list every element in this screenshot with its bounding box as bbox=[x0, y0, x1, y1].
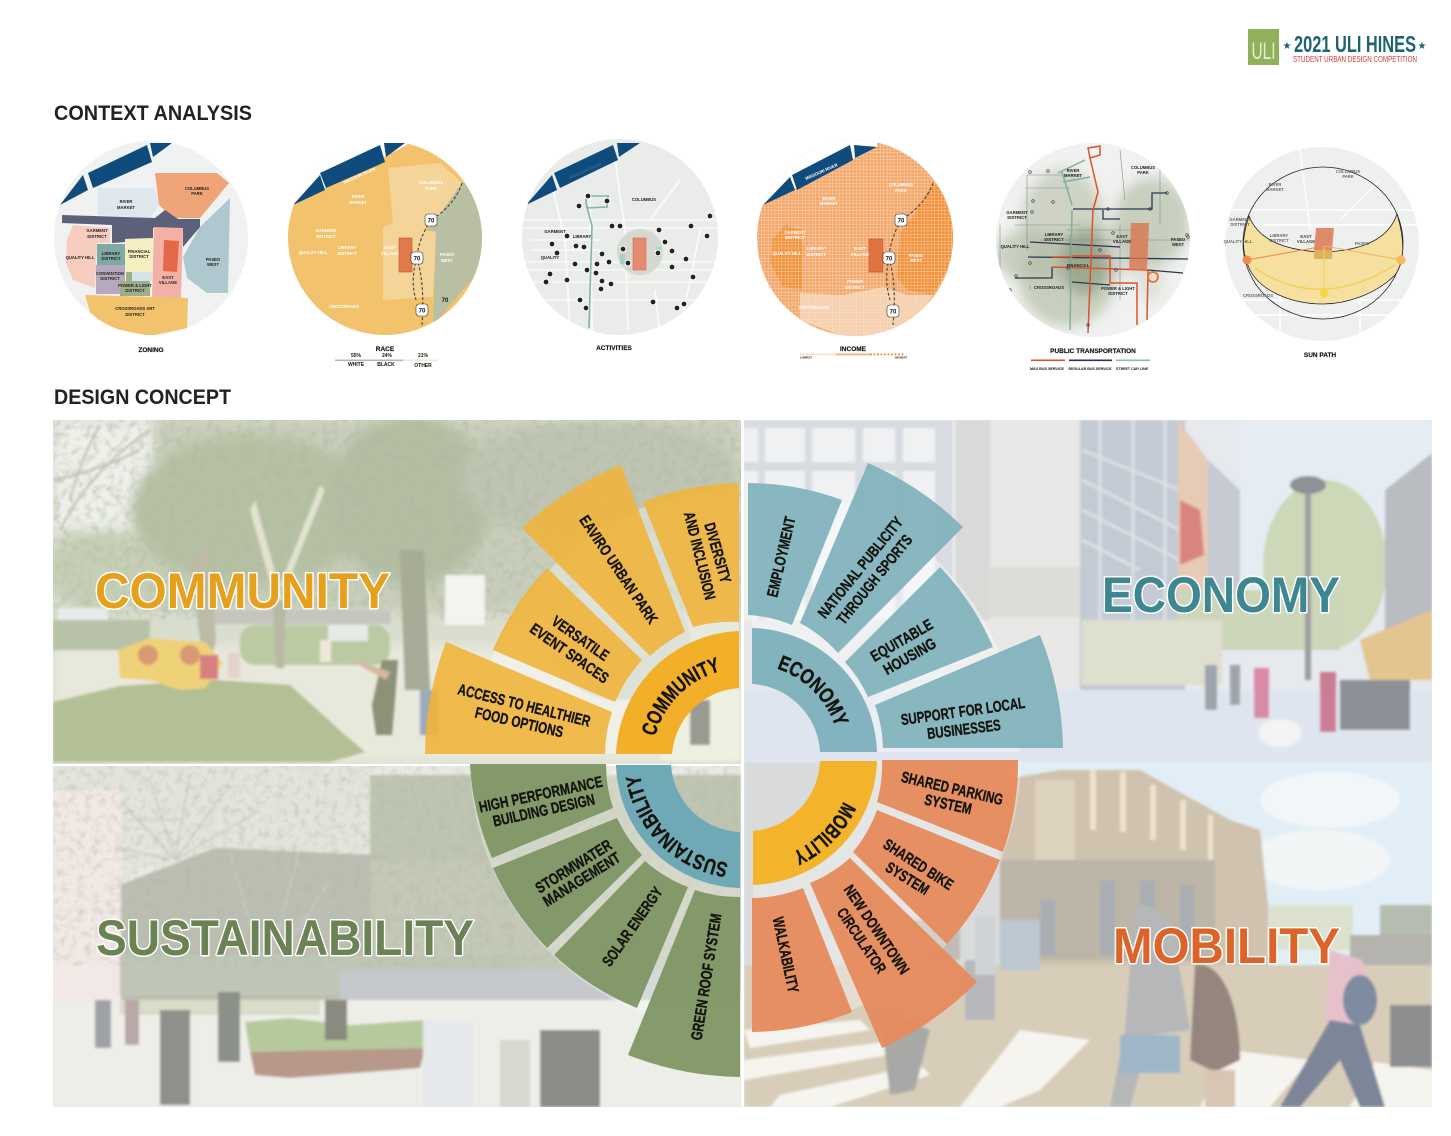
map: activities: MISSOURI RIVER bbox=[569, 161, 602, 180]
map: public transportation: COLUMBUS bbox=[1131, 165, 1155, 170]
wedge: high performance building design bbox=[470, 764, 613, 858]
map: sun path: DISTRICT bbox=[1230, 222, 1250, 227]
quadrant title: community: COMMUNITY bbox=[95, 563, 390, 619]
hub: sustainability: SUSTAINABILITY bbox=[626, 777, 728, 877]
wedge: green roof system: GREEN ROOF SYSTEM bbox=[689, 912, 725, 1042]
wedge: national publicity through sports: THROUGH SPORTS bbox=[834, 532, 916, 628]
wedge: shared bike system: SYSTEM bbox=[882, 859, 932, 899]
quadrant title: economy: ECONOMY bbox=[1102, 567, 1340, 623]
wedge: new downtown circulator bbox=[810, 858, 977, 1048]
wedge: eaviro urban park bbox=[522, 465, 685, 656]
wedge: shared parking system bbox=[877, 760, 1018, 852]
map: race: 70 bbox=[442, 298, 449, 304]
map: income: VILLAGE bbox=[851, 252, 869, 257]
wedge: new downtown circulator: NEW DOWNTOWN bbox=[840, 882, 912, 978]
map: race: EAST bbox=[384, 245, 396, 250]
map: activities: GARMENT bbox=[544, 229, 566, 234]
map: race: COLUMBUS bbox=[419, 180, 443, 185]
map: income: RIVER bbox=[823, 196, 835, 201]
map: sun path: MARKET bbox=[1266, 187, 1284, 192]
legend: race: 55% bbox=[351, 353, 362, 359]
map: zoning: FINANCIAL bbox=[128, 249, 151, 254]
wedge: stormwater management: MANAGEMENT bbox=[540, 849, 624, 911]
wedge: versatile event spaces: VERSATILE bbox=[548, 613, 612, 665]
quadrant title: mobility: MOBILITY bbox=[1113, 918, 1340, 974]
map: zoning: COLUMBUS bbox=[185, 186, 209, 191]
map: public transportation: FINANCIAL bbox=[1067, 263, 1090, 268]
map: zoning bbox=[54, 141, 248, 354]
map: zoning: EAST bbox=[162, 275, 174, 280]
map: race: MISSOURI RIVER bbox=[343, 166, 376, 185]
map: race: RIVER bbox=[352, 194, 364, 199]
map: sun path: COLUMBUS bbox=[1336, 169, 1360, 174]
map: race: LIBRARY bbox=[338, 245, 356, 250]
photo panel: sustainability bbox=[53, 766, 741, 1107]
wedge: high performance building design: BUILDING DESIGN bbox=[491, 791, 597, 831]
wedge: support for local businesses: BUSINESSES bbox=[926, 717, 1002, 743]
wedge: equitable housing: EQUITABLE bbox=[868, 616, 936, 666]
map: public transportation: DISTRICT bbox=[1108, 291, 1128, 296]
map: race: 70 bbox=[428, 218, 435, 224]
logo: 2021 ULI Hines: ULI bbox=[1252, 38, 1276, 65]
map: sun path: PARK bbox=[1342, 174, 1354, 179]
map: income: PASEO bbox=[909, 253, 924, 258]
activity markers bbox=[543, 193, 713, 311]
legend: public transportation: REGULAR BUS SERVICE bbox=[1068, 366, 1112, 371]
legend: race: 24% bbox=[382, 353, 393, 359]
map: income: PARK bbox=[895, 188, 907, 193]
legend: race: WHITE bbox=[348, 362, 365, 368]
map: income: EAST bbox=[854, 246, 866, 251]
map: zoning: DISTRICT bbox=[125, 312, 145, 317]
map: zoning: CONVENTION bbox=[96, 271, 124, 276]
legend: income: LOWEST bbox=[800, 356, 812, 360]
photo panel: economy bbox=[744, 420, 1432, 764]
hub: community: COMMUNITY bbox=[642, 657, 717, 734]
map: income: GARMENT bbox=[784, 230, 806, 235]
map: race: DISTRICT bbox=[337, 251, 357, 256]
legend: income: HIGHEST bbox=[895, 356, 908, 360]
map: zoning: DISTRICT bbox=[125, 288, 145, 293]
wedge: shared bike system: SHARED BIKE bbox=[880, 836, 956, 894]
map: sun path: GARMENT bbox=[1229, 217, 1251, 222]
map: zoning: DISTRICT bbox=[87, 234, 107, 239]
wedge: versatile event spaces: EVENT SPACES bbox=[526, 621, 612, 687]
map: zoning: DISTRICT bbox=[101, 256, 121, 261]
map: race: DISTRICT bbox=[316, 234, 336, 239]
wedge: green roof system bbox=[628, 890, 740, 1077]
map: public transportation: EAST bbox=[1116, 234, 1128, 239]
fan: sustainability bbox=[470, 764, 740, 1077]
caption: sun path: SUN PATH bbox=[1304, 352, 1336, 359]
wedge: national publicity through sports bbox=[800, 463, 963, 653]
legend: public transportation bbox=[1030, 348, 1150, 371]
map: income: POWER bbox=[847, 279, 863, 284]
map: zoning: LIBRARY bbox=[102, 251, 120, 256]
map: zoning: RIVER bbox=[120, 199, 132, 204]
map: zoning: GARMENT bbox=[86, 228, 108, 233]
legend: public transportation: STREET CAR LINE bbox=[1116, 366, 1148, 371]
map: race bbox=[280, 141, 490, 369]
map: zoning: WEST bbox=[207, 262, 219, 267]
wedge: equitable housing: HOUSING bbox=[881, 635, 939, 679]
map: sun path: QUALITY HILL bbox=[1224, 239, 1253, 244]
map: race: 70 bbox=[419, 308, 426, 314]
map: race: PASEO bbox=[440, 252, 455, 257]
caption: activities: ACTIVITIES bbox=[596, 345, 633, 352]
map: public transportation: GARMENT bbox=[1006, 210, 1028, 215]
map: public transportation: LIBRARY bbox=[1045, 232, 1063, 237]
hub: mobility bbox=[753, 761, 877, 885]
map: sun path: LIBRARY bbox=[1270, 233, 1288, 238]
wedge: eaviro urban park: EAVIRO URBAN PARK bbox=[575, 513, 661, 628]
fan: community bbox=[425, 465, 739, 754]
wedge: solar energy bbox=[554, 861, 688, 1008]
heading: design concept: DESIGN CONCEPT bbox=[54, 386, 231, 409]
wedge: high performance building design: HIGH PERFORMANCE bbox=[478, 774, 604, 816]
map: income: 70 bbox=[898, 218, 905, 224]
map: zoning: MARKET bbox=[117, 205, 135, 210]
map: public transportation: VILLAGE bbox=[1113, 239, 1131, 244]
map: race: PARK bbox=[425, 186, 437, 191]
map: income: 70 bbox=[886, 256, 893, 262]
map: income: MISSOURI RIVER bbox=[805, 162, 838, 181]
legend: race bbox=[335, 346, 438, 369]
map: income: DISTRICT bbox=[785, 235, 805, 240]
map: income: 70 bbox=[890, 310, 897, 316]
legend: income bbox=[800, 346, 908, 360]
wedge: employment: EMPLOYMENT bbox=[764, 515, 800, 599]
wedge: access to healthier food options: ACCESS TO HEALTHIER bbox=[456, 681, 592, 731]
map: zoning: PASEO bbox=[206, 257, 221, 262]
logo: 2021 ULI Hines: ★ bbox=[1418, 41, 1427, 52]
wedge: national publicity through sports: NATIONAL PUBLICITY bbox=[815, 514, 907, 622]
legend: race: 21% bbox=[418, 353, 429, 359]
fan: economy bbox=[748, 463, 1063, 752]
map: activities: LIBRARY bbox=[573, 234, 591, 239]
map: sun path: EAST bbox=[1300, 234, 1312, 239]
legend: race: OTHER bbox=[414, 363, 432, 369]
hub: mobility: MOBILITY bbox=[796, 802, 856, 866]
caption: zoning: ZONING bbox=[138, 347, 164, 354]
wedge: walkability bbox=[752, 888, 852, 1032]
hub: economy bbox=[752, 628, 877, 752]
wedge: stormwater management bbox=[493, 818, 642, 948]
map: public transportation: QUALITY HILL bbox=[1001, 244, 1030, 249]
heading: context analysis: CONTEXT ANALYSIS bbox=[54, 102, 252, 125]
map: income: QUALITY HILL bbox=[773, 251, 802, 256]
map: zoning: POWER & LIGHT bbox=[118, 283, 152, 288]
wedge: support for local businesses bbox=[875, 635, 1063, 748]
map: activities bbox=[522, 139, 718, 352]
wedge: equitable housing bbox=[845, 567, 993, 697]
wedge: shared parking system: SHARED PARKING bbox=[899, 769, 1005, 809]
map: income bbox=[750, 140, 958, 360]
map: sun path: VILLAGE bbox=[1297, 239, 1315, 244]
map: race: VILLAGE bbox=[381, 251, 399, 256]
legend: public transportation: PUBLIC TRANSPORTATION bbox=[1050, 348, 1136, 355]
map: sun path: RIVER bbox=[1269, 182, 1281, 187]
map: public transportation: POWER & LIGHT bbox=[1101, 286, 1135, 291]
quadrant title: sustainability: SUSTAINABILITY bbox=[96, 910, 474, 966]
wedge: shared parking system: SYSTEM bbox=[923, 792, 973, 818]
map: public transportation bbox=[995, 142, 1192, 371]
wedge: solar energy: SOLAR ENERGY bbox=[599, 884, 667, 970]
map: race: QUALITY HILL bbox=[299, 250, 328, 255]
map: public transportation: DISTRICT bbox=[1044, 237, 1064, 242]
logo: 2021 ULI Hines: ★ bbox=[1283, 41, 1292, 52]
photo panel: mobility bbox=[744, 762, 1432, 1107]
map: income: DISTRICT bbox=[806, 252, 826, 257]
map: income: LIBRARY bbox=[807, 246, 825, 251]
map: zoning: DISTRICT bbox=[129, 254, 149, 259]
map: income: WEST bbox=[910, 258, 922, 263]
map: race: 70 bbox=[414, 256, 421, 262]
map: zoning: CROSSROADS ART bbox=[115, 306, 155, 311]
map: public transportation: MARKET bbox=[1064, 173, 1082, 178]
hub: economy: ECONOMY bbox=[778, 655, 850, 724]
wedge: walkability: WALKABILITY bbox=[769, 916, 801, 995]
map: zoning: PARK bbox=[191, 191, 203, 196]
wedge: diversity and inclusion bbox=[643, 483, 739, 627]
map: zoning: QUALITY HILL bbox=[66, 255, 95, 260]
map: sun path: PASEO bbox=[1355, 241, 1370, 246]
map: public transportation: RIVER bbox=[1067, 168, 1079, 173]
wedge: versatile event spaces bbox=[493, 568, 642, 702]
wedge: diversity and inclusion: AND INCLUSION bbox=[680, 510, 718, 602]
map: income: MARKET bbox=[820, 201, 838, 206]
map: income: DISTRICT bbox=[845, 285, 865, 290]
logo: 2021 ULI Hines bbox=[1248, 29, 1427, 65]
wedge: new downtown circulator: CIRCULATOR bbox=[833, 905, 889, 977]
wedge: access to healthier food options: FOOD OPTIONS bbox=[473, 705, 565, 741]
map: income: CROSSROADS bbox=[799, 305, 829, 310]
photo panel: community bbox=[45, 415, 741, 764]
legend: public transportation: MAX BUS SERVICE bbox=[1030, 366, 1064, 371]
legend: race: BLACK bbox=[377, 362, 395, 368]
map: race: CROSSROADS bbox=[329, 304, 359, 309]
wedge: diversity and inclusion: DIVERSITY bbox=[700, 521, 734, 586]
map: public transportation: WEST bbox=[1172, 242, 1184, 247]
map: sun path bbox=[1224, 147, 1420, 359]
map: activities: COLUMBUS bbox=[632, 197, 656, 202]
wedge: stormwater management: STORMWATER bbox=[533, 837, 615, 897]
hub: community bbox=[616, 631, 739, 754]
wedge: support for local businesses: SUPPORT FOR LOCAL bbox=[900, 695, 1026, 729]
map: sun path: CROSSROADS bbox=[1243, 293, 1273, 298]
map: income: COLUMBUS bbox=[889, 182, 913, 187]
wedge: access to healthier food options bbox=[425, 642, 612, 754]
map: activities: QUALITY bbox=[541, 255, 559, 260]
map: sun path: DISTRICT bbox=[1269, 238, 1289, 243]
legend: race: RACE bbox=[376, 346, 395, 353]
map: race: WEST bbox=[441, 258, 453, 263]
map: race: GARMENT bbox=[315, 228, 337, 233]
wedge: employment bbox=[748, 483, 842, 625]
legend: income: INCOME bbox=[840, 346, 867, 353]
map: zoning: DISTRICT bbox=[100, 276, 120, 281]
map: zoning: VILLAGE bbox=[159, 280, 177, 285]
map: public transportation: PARK bbox=[1137, 170, 1149, 175]
map: race: MARKET bbox=[349, 200, 367, 205]
map: public transportation: PASEO bbox=[1171, 237, 1186, 242]
fan: mobility bbox=[752, 760, 1021, 1048]
map: public transportation: CROSSROADS bbox=[1034, 285, 1064, 290]
wedge: shared bike system bbox=[853, 810, 1000, 944]
map: public transportation: DISTRICT bbox=[1007, 215, 1027, 220]
